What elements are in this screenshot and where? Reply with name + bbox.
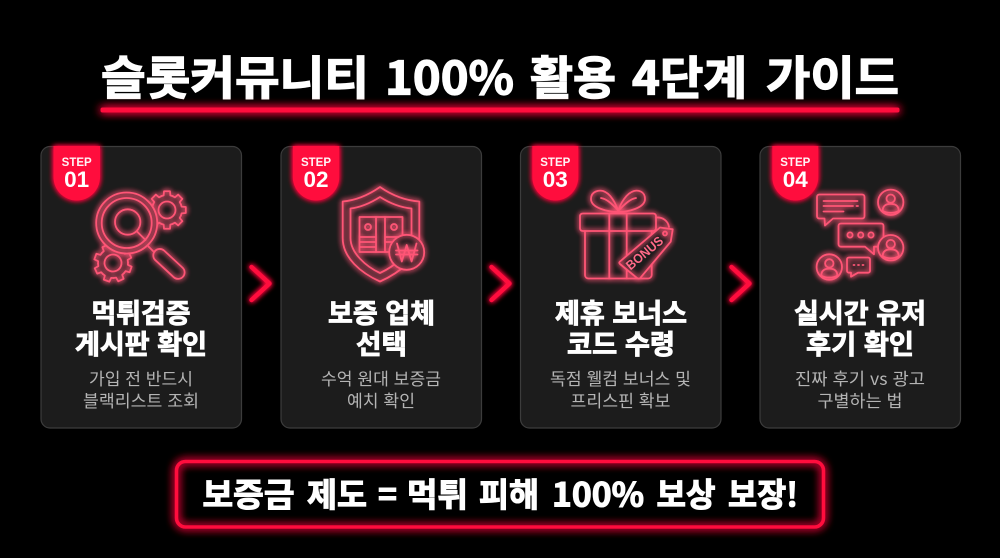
text: step 3 description: 프리스핀 확보	[570, 387, 670, 412]
text: step 1 description: 가입 전 반드시	[89, 365, 193, 390]
badge: step 03	[532, 146, 578, 200]
heading: step 1: 먹튀검증	[92, 292, 190, 331]
panel: step 4	[760, 146, 960, 428]
callout text: 보상	[656, 468, 716, 516]
text: step 4 description: 진짜 후기 vs 광고	[795, 365, 925, 390]
text: step 1 description	[83, 365, 199, 412]
heading: step 1: 게시판 확인	[75, 323, 207, 362]
badge: step 01: STEP	[62, 157, 92, 169]
title: 4단계	[632, 42, 747, 108]
icon: gift box with bonus tag	[580, 191, 673, 278]
heading: step 4	[794, 292, 926, 362]
badge: step 02: 02	[303, 167, 329, 192]
title: 100%	[385, 42, 514, 108]
text: step 1 description: 블랙리스트 조회	[83, 387, 199, 412]
arrow: step 1 to 2	[252, 267, 270, 300]
text: step 3 description: 독점 웰컴 보너스 및	[550, 365, 691, 390]
heading: step 1	[75, 292, 207, 362]
arrow: step 2 to 3	[492, 267, 510, 300]
badge: step 04: 04	[783, 167, 808, 192]
text: step 3 description	[550, 365, 691, 412]
title: 가이드	[766, 42, 899, 108]
panel: step 1	[41, 146, 242, 428]
text: step 2 description: 수억 원대 보증금	[321, 365, 441, 390]
badge: step 03: STEP	[540, 157, 571, 169]
callout box	[176, 462, 824, 527]
badge: step 01: 01	[64, 167, 89, 192]
heading: step 4: 실시간 유저	[794, 292, 926, 331]
callout text: =	[378, 468, 397, 516]
callout text: 보장!	[728, 468, 798, 516]
heading: step 2: 선택	[356, 323, 407, 362]
callout text: 먹튀	[407, 468, 468, 516]
title: 슬롯커뮤니티	[101, 42, 369, 108]
text: step 2 description	[321, 365, 441, 412]
heading: step 3: 코드 수령	[567, 323, 675, 362]
icon: shield with money and won coin	[343, 187, 424, 282]
icon: magnifier and gears	[89, 191, 187, 287]
callout text	[202, 468, 798, 516]
text: step 4 description: 구별하는 법	[818, 387, 902, 412]
badge: step 02: STEP	[301, 157, 331, 169]
heading: step 3	[555, 292, 687, 362]
heading: step 2: 보증 업체	[328, 292, 435, 331]
callout text: 100%	[552, 468, 644, 516]
panel: step 3	[520, 146, 721, 428]
callout text: 피해	[479, 468, 539, 516]
title: 활용	[530, 42, 616, 108]
badge: step 02	[293, 146, 339, 200]
heading: step 3: 제휴 보너스	[555, 292, 687, 331]
badge: step 01	[54, 146, 100, 200]
icon: chat bubbles and users	[817, 190, 903, 280]
badge: step 04: STEP	[780, 157, 811, 169]
callout text: 제도	[307, 468, 367, 516]
badge: step 03: 03	[543, 167, 568, 192]
text: step 4 description	[795, 365, 925, 412]
icon label: bonus: BONUS	[623, 233, 666, 273]
title	[101, 42, 899, 108]
text: step 2 description: 예치 확인	[347, 387, 415, 412]
heading: step 4: 후기 확인	[806, 323, 914, 362]
callout text: 보증금	[202, 468, 294, 516]
title underline	[100, 108, 900, 112]
badge: step 04	[772, 146, 818, 200]
heading: step 2	[328, 292, 435, 362]
panel: step 2	[281, 146, 482, 428]
arrow: step 3 to 4	[732, 267, 750, 300]
